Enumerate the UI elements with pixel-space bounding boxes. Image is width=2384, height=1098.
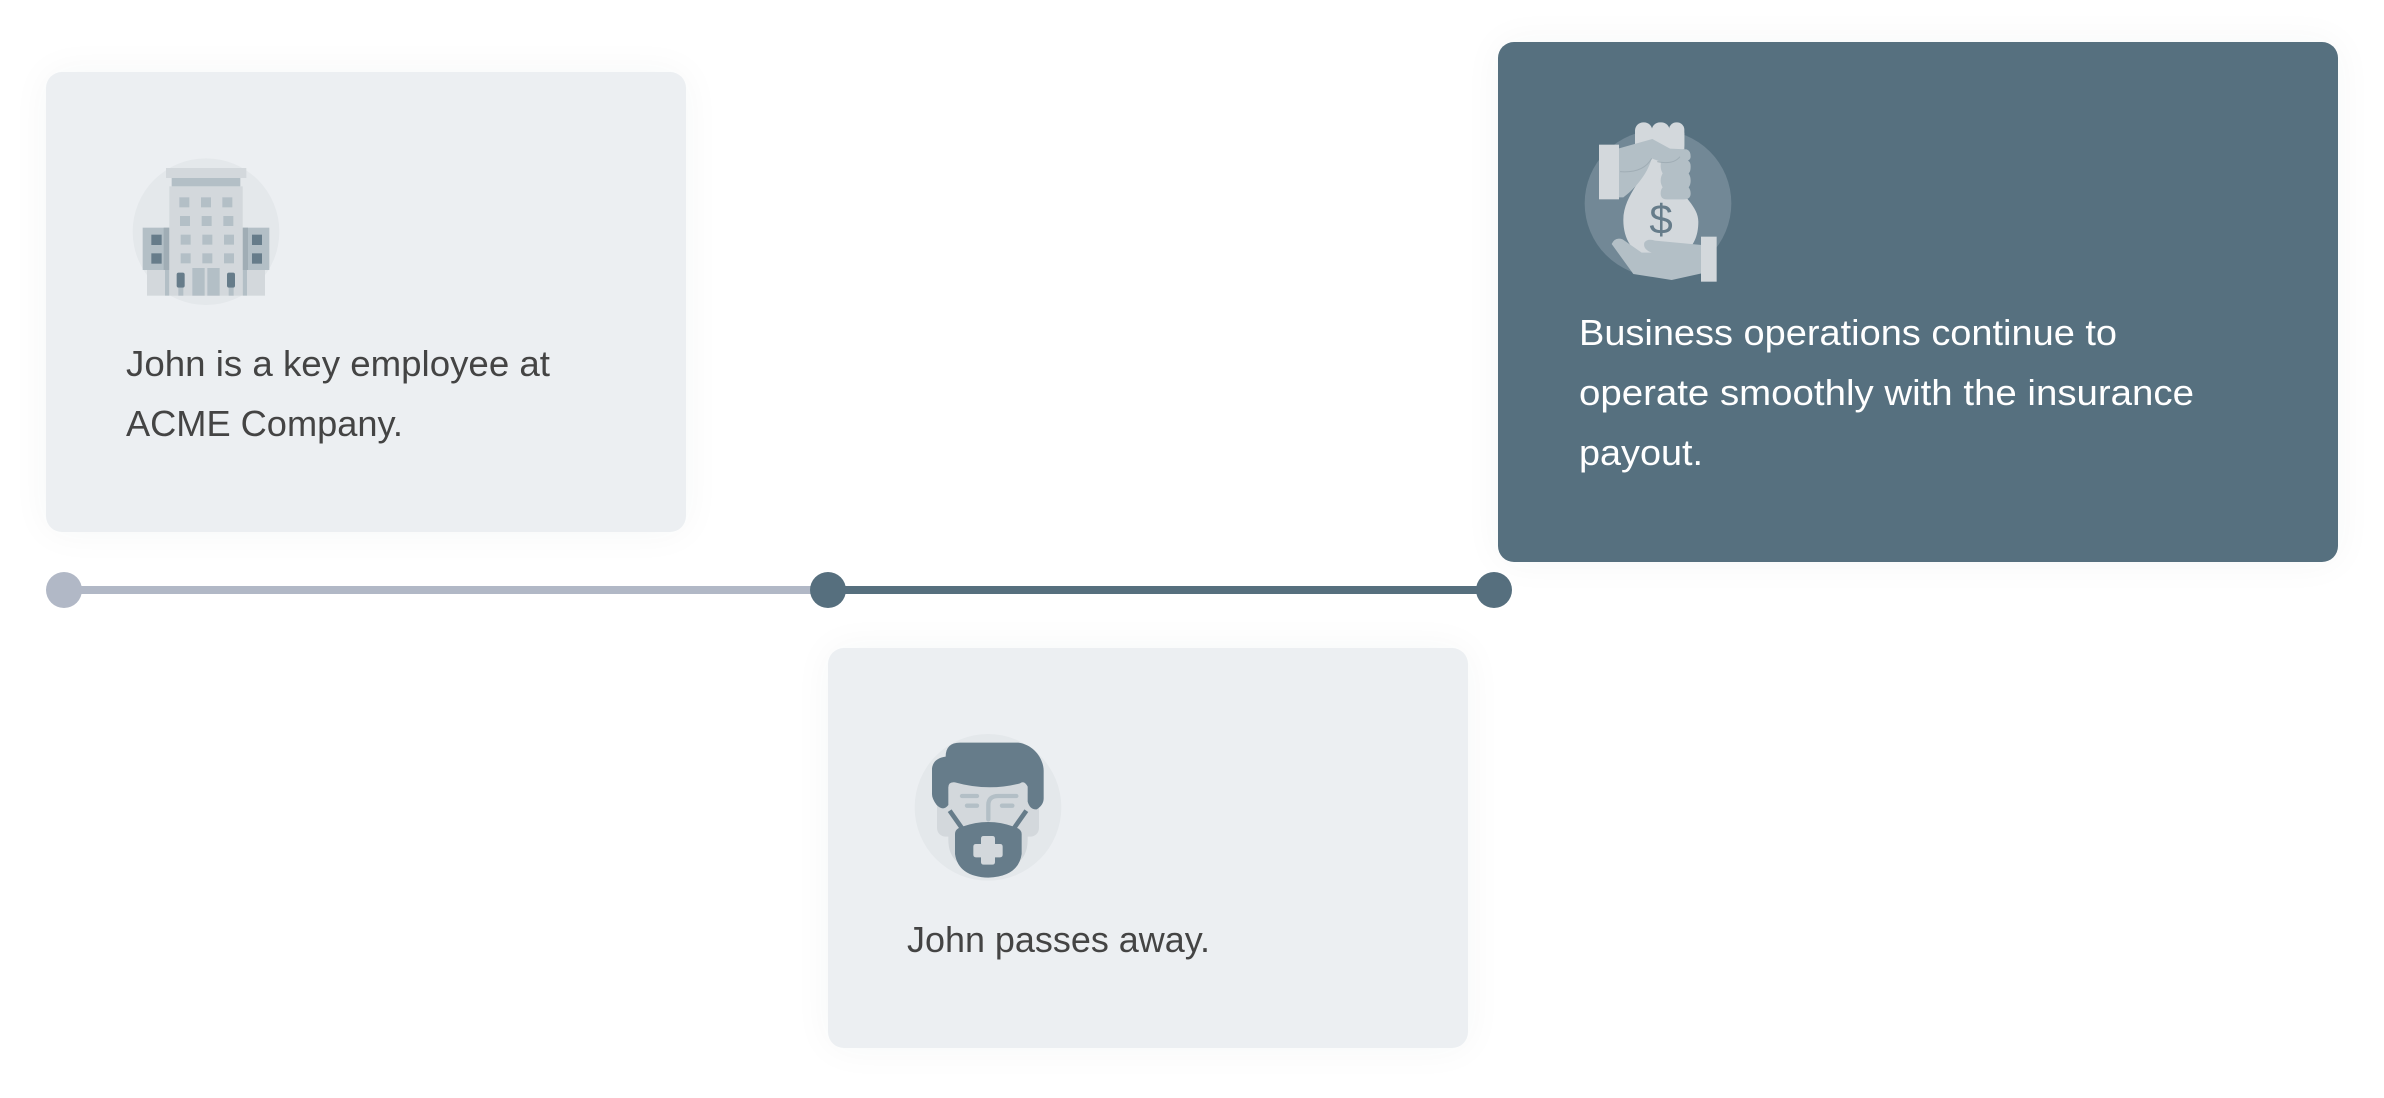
- text: business operations continue: Business operations continue to: [1579, 312, 2117, 353]
- panel: John passes away: [828, 648, 1468, 1048]
- panel: business operations continue: [1498, 42, 2338, 562]
- icon: man with medical mask: [915, 734, 1061, 881]
- text: business operations continue: operate smoothly with the insurance: [1579, 372, 2194, 413]
- timeline segment: after: [828, 586, 1494, 594]
- icon: office building: [133, 158, 279, 305]
- icon: hands exchanging money bag: [1585, 122, 1731, 282]
- timeline dot: middle: [810, 572, 846, 608]
- text: John passes away: John passes away.: [907, 919, 1210, 960]
- timeline dot: end: [1476, 572, 1512, 608]
- text: John is a key employee: [126, 343, 550, 444]
- icon: dollar sign: $: [1649, 195, 1673, 242]
- timeline dot: start: [46, 572, 82, 608]
- timeline segment: before: [64, 586, 828, 594]
- text: business operations continue: payout.: [1579, 432, 1703, 473]
- text: John is a key employee: John is a key employee at: [126, 343, 550, 384]
- panel: John is a key employee: [46, 72, 686, 532]
- text: John is a key employee: ACME Company.: [126, 403, 403, 444]
- text: business operations continue: [1579, 312, 2194, 473]
